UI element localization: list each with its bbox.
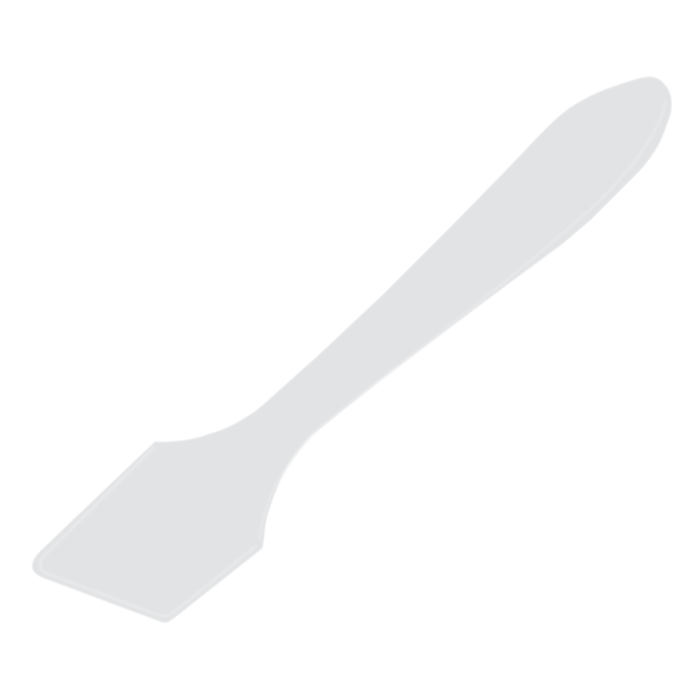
spatula xyxy=(32,77,671,622)
handle light rim xyxy=(259,100,666,540)
blade light rim xyxy=(40,446,256,616)
spatula body outline xyxy=(32,77,671,622)
